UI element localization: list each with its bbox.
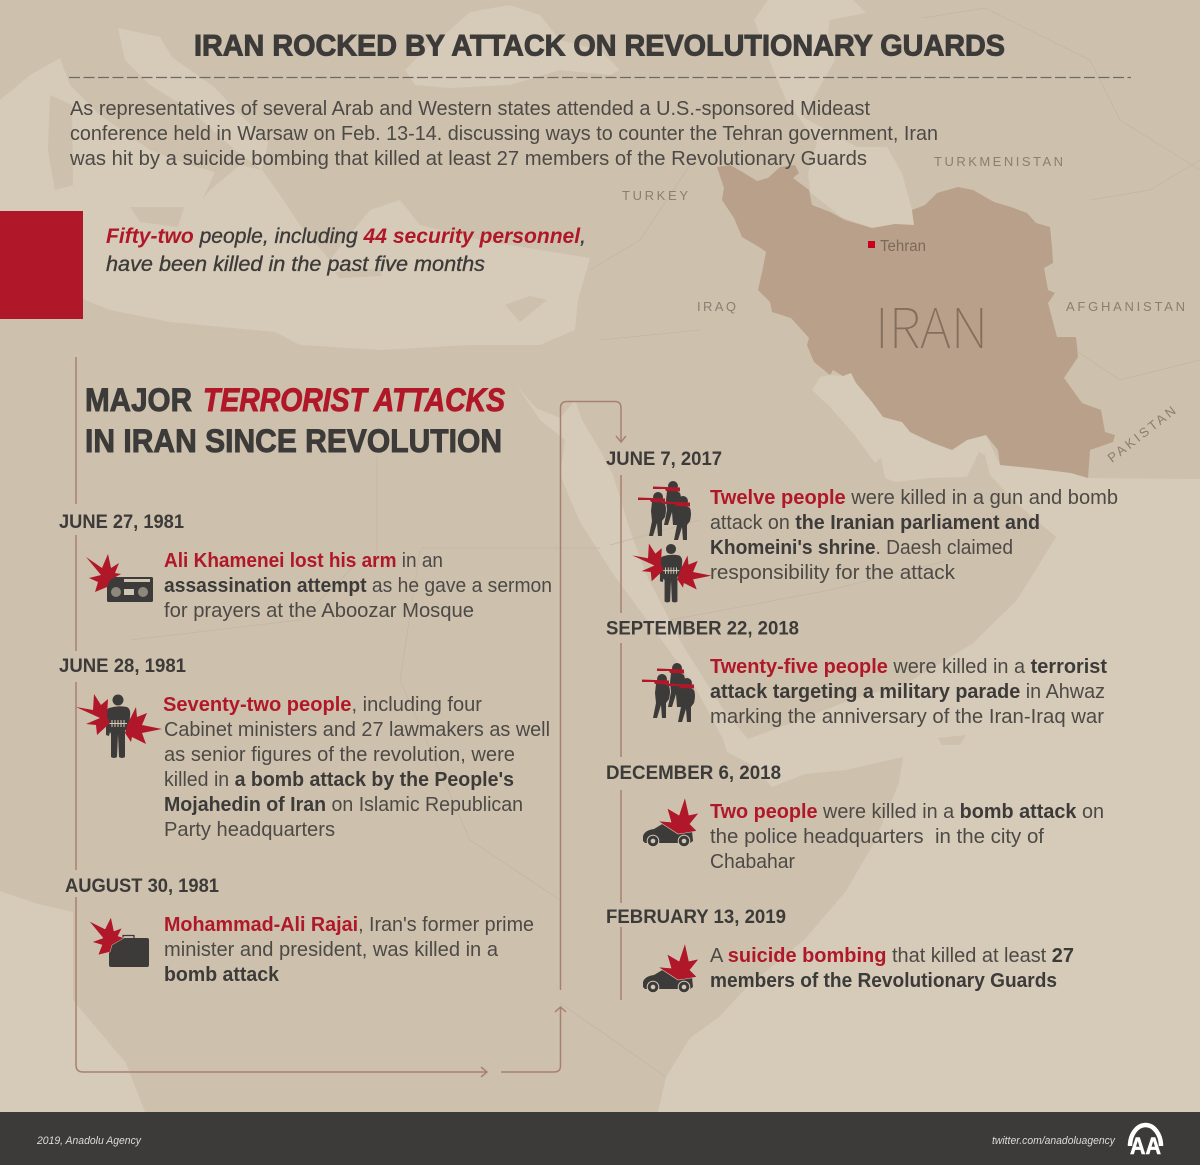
- map label: Turkey: TURKEY: [622, 188, 688, 203]
- map marker: Tehran: Tehran: [880, 238, 926, 255]
- event: December 6, 2018: Chabahar: [710, 850, 795, 873]
- map label: Pakistan: PAKISTAN: [1105, 403, 1178, 465]
- footer credit: 2019, Anadolu Agency: [36, 1135, 142, 1147]
- intro text: conference held in Warsaw on Feb. 13-14. discussing ways to counter the Tehran government, Iran: [70, 122, 938, 145]
- icon: car bomb: [643, 943, 699, 993]
- event: December 6, 2018: DECEMBER 6, 2018: [606, 762, 781, 784]
- event: August 30, 1981: bomb attack: [164, 963, 280, 986]
- event: February 13, 2019: FEBRUARY 13, 2019: [606, 906, 786, 928]
- map label: Afghanistan: AFGHANISTAN: [1066, 299, 1185, 314]
- heading: major terrorist attacks: IN IRAN SINCE REVOLUTION: [85, 423, 502, 459]
- map label: Turkmenistan: TURKMENISTAN: [934, 154, 1063, 169]
- event: June 28, 1981: killed in a bomb attack by the People's: [164, 768, 514, 791]
- event: August 30, 1981: AUGUST 30, 1981: [65, 875, 219, 897]
- heading: major terrorist attacks: [85, 382, 506, 459]
- heading: major terrorist attacks: MAJOR: [85, 382, 192, 418]
- heading: major terrorist attacks: TERRORIST ATTACKS: [203, 382, 506, 418]
- event: June 28, 1981: as senior figures of the revolution, were: [164, 743, 515, 766]
- callout: death toll: [106, 225, 586, 276]
- timeline connector arrows: [76, 357, 626, 1077]
- event: June 7, 2017: [606, 448, 1118, 602]
- callout: death toll: have been killed in the past five months: [106, 253, 486, 276]
- event: September 22, 2018: Twenty-five people were killed in a terrorist: [710, 655, 1107, 678]
- icon: gunmen: [642, 663, 695, 722]
- event: June 7, 2017: responsibility for the attack: [710, 561, 956, 584]
- event: August 30, 1981: Mohammad-Ali Rajai, Iran's former prime: [164, 913, 534, 936]
- map: Iran country shape: [717, 165, 1115, 478]
- event: August 30, 1981: [65, 875, 534, 986]
- event: June 28, 1981: Party headquarters: [164, 818, 335, 841]
- icon: briefcase bomb: [89, 917, 149, 967]
- icon: suicide bomber: [76, 694, 162, 758]
- event: September 22, 2018: attack targeting a military parade in Ahwaz: [710, 680, 1105, 703]
- event: June 7, 2017: JUNE 7, 2017: [606, 448, 722, 470]
- intro text: was hit by a suicide bombing that killed at least 27 members of the Revolutionary Guards: [69, 147, 867, 170]
- event: June 7, 2017: Khomeini's shrine. Daesh claimed: [710, 536, 1013, 559]
- red accent block: [0, 211, 83, 319]
- callout: death toll: Fifty-two people, including 44 security personnel,: [106, 225, 586, 248]
- event: February 13, 2019: A suicide bombing that killed at least 27: [710, 944, 1074, 967]
- event: December 6, 2018: the police headquarters in the city of: [710, 825, 1044, 848]
- event: August 30, 1981: minister and president, was killed in a: [164, 938, 499, 961]
- icon: radio bomb: [86, 554, 153, 602]
- event: June 28, 1981: [59, 655, 550, 841]
- event: December 6, 2018: Two people were killed in a bomb attack on: [710, 800, 1104, 823]
- event: June 27, 1981: for prayers at the Aboozar Mosque: [164, 599, 474, 622]
- map label: Iraq: IRAQ: [697, 299, 736, 314]
- footer twitter: twitter.com/anadoluagency: [992, 1135, 1116, 1147]
- event: June 28, 1981: JUNE 28, 1981: [59, 655, 186, 677]
- event: June 27, 1981: JUNE 27, 1981: [59, 511, 184, 533]
- event: September 22, 2018: SEPTEMBER 22, 2018: [606, 618, 799, 640]
- intro text: As representatives of several Arab and Western states attended a U.S.-sponsored Mideast: [70, 97, 870, 120]
- event: September 22, 2018: [606, 618, 1107, 728]
- event: February 13, 2019: [606, 906, 1074, 993]
- icon: gunmen: [638, 481, 691, 540]
- icon: car bomb: [643, 797, 699, 847]
- event: June 27, 1981: [59, 511, 552, 622]
- footer bar: [0, 1112, 1200, 1165]
- icon: Anadolu Agency logo: AA: [1130, 1133, 1161, 1160]
- event: June 27, 1981: assassination attempt as he gave a sermon: [164, 574, 552, 597]
- event: September 22, 2018: marking the anniversary of the Iran-Iraq war: [710, 705, 1104, 728]
- event: June 7, 2017: Twelve people were killed in a gun and bomb: [710, 486, 1118, 509]
- event: June 28, 1981: Seventy-two people, including four: [163, 693, 482, 716]
- event: February 13, 2019: members of the Revolutionary Guards: [710, 969, 1057, 992]
- event: June 27, 1981: Ali Khamenei lost his arm in an: [164, 549, 443, 572]
- event: June 7, 2017: attack on the Iranian parliament and: [710, 511, 1040, 534]
- event: December 6, 2018: [606, 762, 1104, 873]
- intro text: [69, 97, 938, 170]
- map label: Iran: IRAN: [875, 284, 988, 364]
- event: June 28, 1981: Mojahedin of Iran on Islamic Republican: [164, 793, 523, 816]
- event: June 28, 1981: Cabinet ministers and 27 lawmakers as well: [164, 718, 550, 741]
- title: IRAN ROCKED BY ATTACK ON REVOLUTIONARY GUARDS: [194, 30, 1005, 62]
- icon: suicide bomber: [632, 543, 711, 602]
